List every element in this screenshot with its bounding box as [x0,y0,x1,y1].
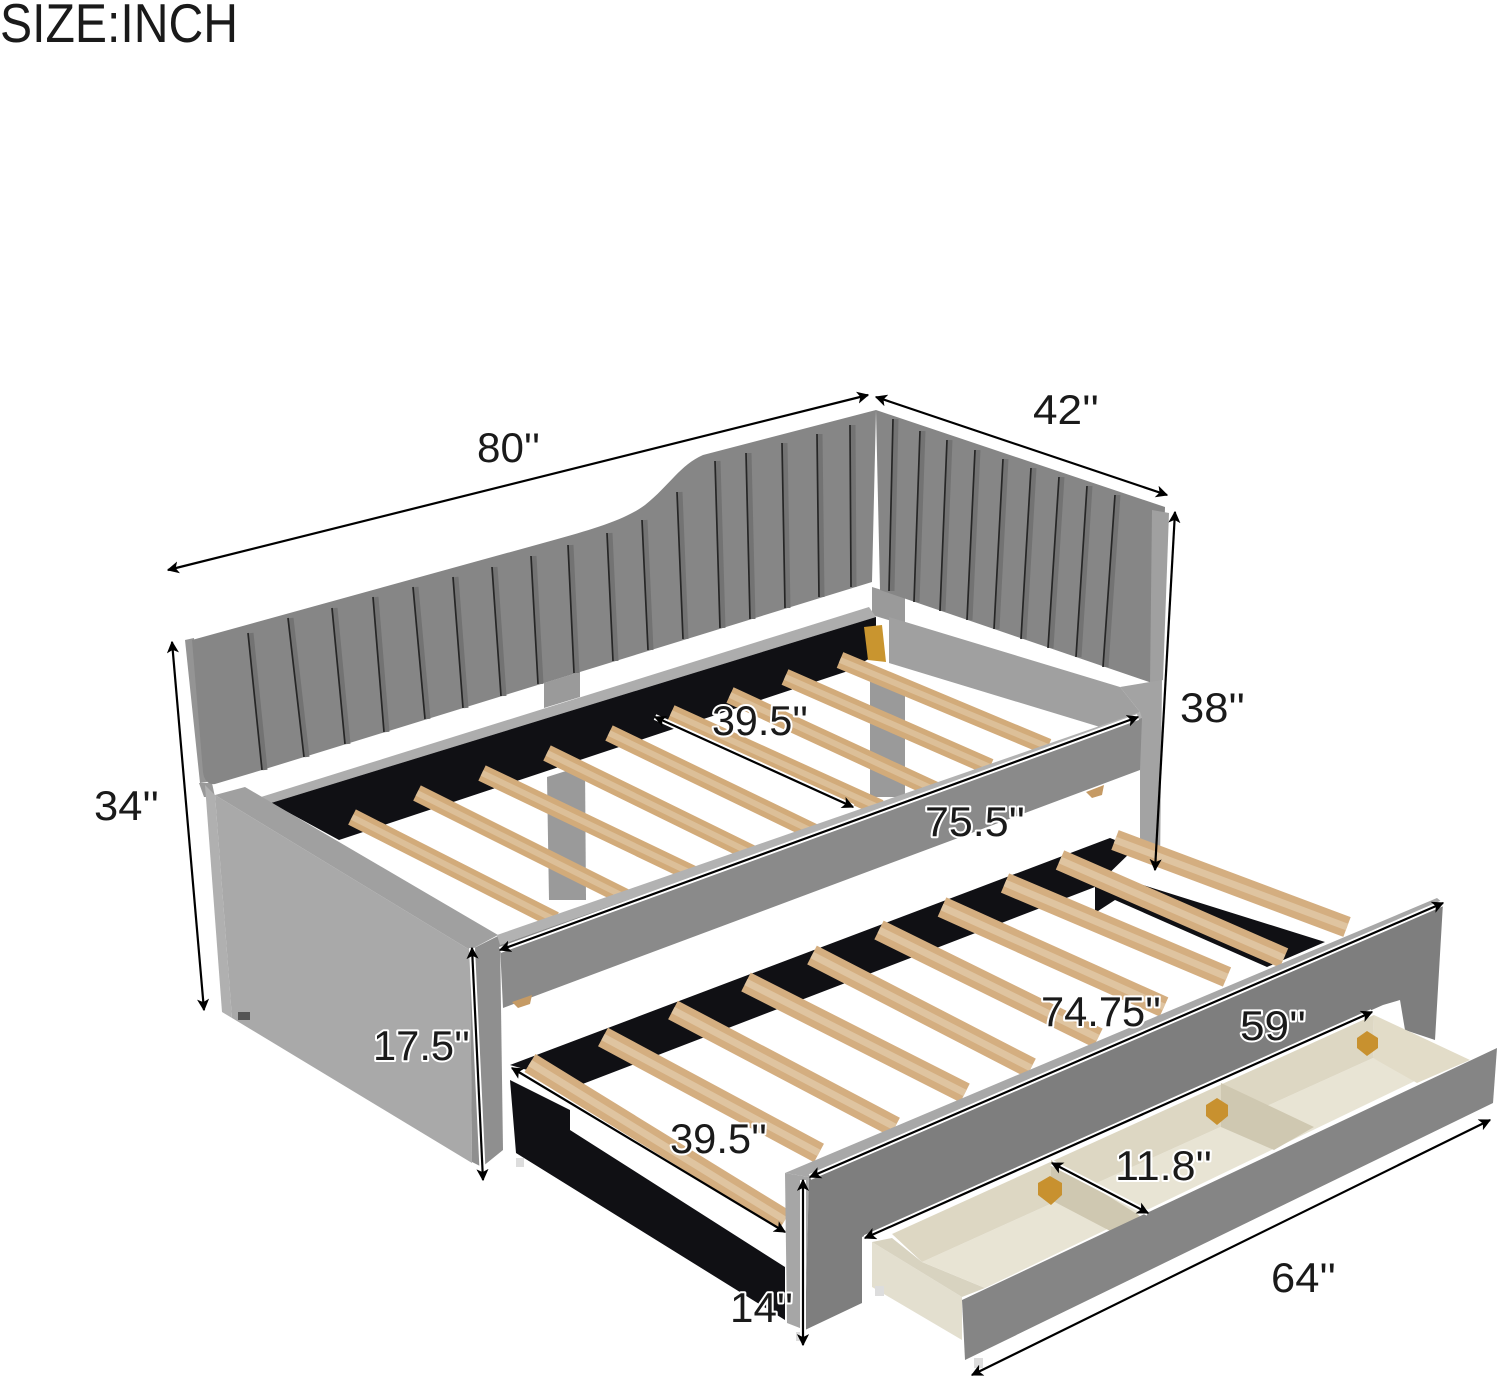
drawer floor [922,1058,1417,1288]
left arm panel [205,785,503,1167]
short upholstered backrest [876,410,1169,684]
drawer dividers [1051,1083,1314,1232]
dimension: upper slat width 39.5: 39.5'' [712,697,808,744]
mounting bracket [864,625,886,662]
dimension: trundle slat width 39.5 [512,1068,785,1232]
dimension: trundle length 74.75 [810,903,1443,1177]
dimension: trundle height 14: 14'' [730,1284,793,1331]
side rail [889,617,1140,727]
dimension: low arm height 34 [94,642,204,1010]
drawer back wall [892,1015,1374,1262]
short backrest channel ribs [889,419,1118,667]
dimension: drawer length 64 [972,1120,1490,1375]
drawer inner side wall [872,1238,985,1297]
drawer brackets [1038,1031,1378,1205]
drawer outer side [872,1242,962,1340]
dimension: drawer inner length 59: 59'' [1240,1002,1306,1049]
dimension: overall depth 42: 42'' [1033,386,1099,433]
long upholstered backrest [185,410,876,797]
storage drawer [872,1015,1497,1368]
dimension: drawer inner length 59 [865,1002,1372,1238]
dimension: upper rail length 75.5 [500,717,1138,950]
dimension: trundle length 74.75: 74.75'' [1041,988,1161,1035]
dimension: overall length 80 [168,395,868,570]
drawer front [962,1048,1497,1360]
dimension: overall length 80: 80'' [477,424,540,471]
dimension: drawer depth 11.8: 11.8'' [1115,1142,1212,1189]
dimension: overall depth 42 [876,386,1167,495]
dimension: drawer length 64: 64'' [1271,1254,1336,1301]
trundle front panel [785,898,1443,1341]
trundle bed [510,838,1497,1368]
dimension: upper rail length 75.5: 75.5'' [925,798,1025,845]
dimension: high side height 38: 38'' [1180,684,1245,731]
back rail [261,607,876,840]
dimension: frame height 17.5: 17.5'' [373,1022,470,1069]
dimension: trundle slat width 39.5: 39.5'' [670,1115,767,1162]
backrest channel ribs [248,425,854,770]
trundle slats [530,840,1347,1220]
dimension: low arm height 34: 34'' [94,782,159,829]
trundle rails [510,838,1325,1320]
dimension: high side height 38 [1155,512,1245,870]
upper bed slats [352,660,1048,920]
drawer right wall [1373,1015,1470,1083]
dimension: upper slat width 39.5 [655,697,853,807]
front rail [497,712,1142,1008]
rear legs [544,587,905,900]
right front leg [1120,680,1162,868]
dimension: frame height 17.5 [373,948,483,1180]
dimension: drawer depth 11.8 [1052,1142,1212,1213]
daybed upper frame [185,410,1169,1167]
